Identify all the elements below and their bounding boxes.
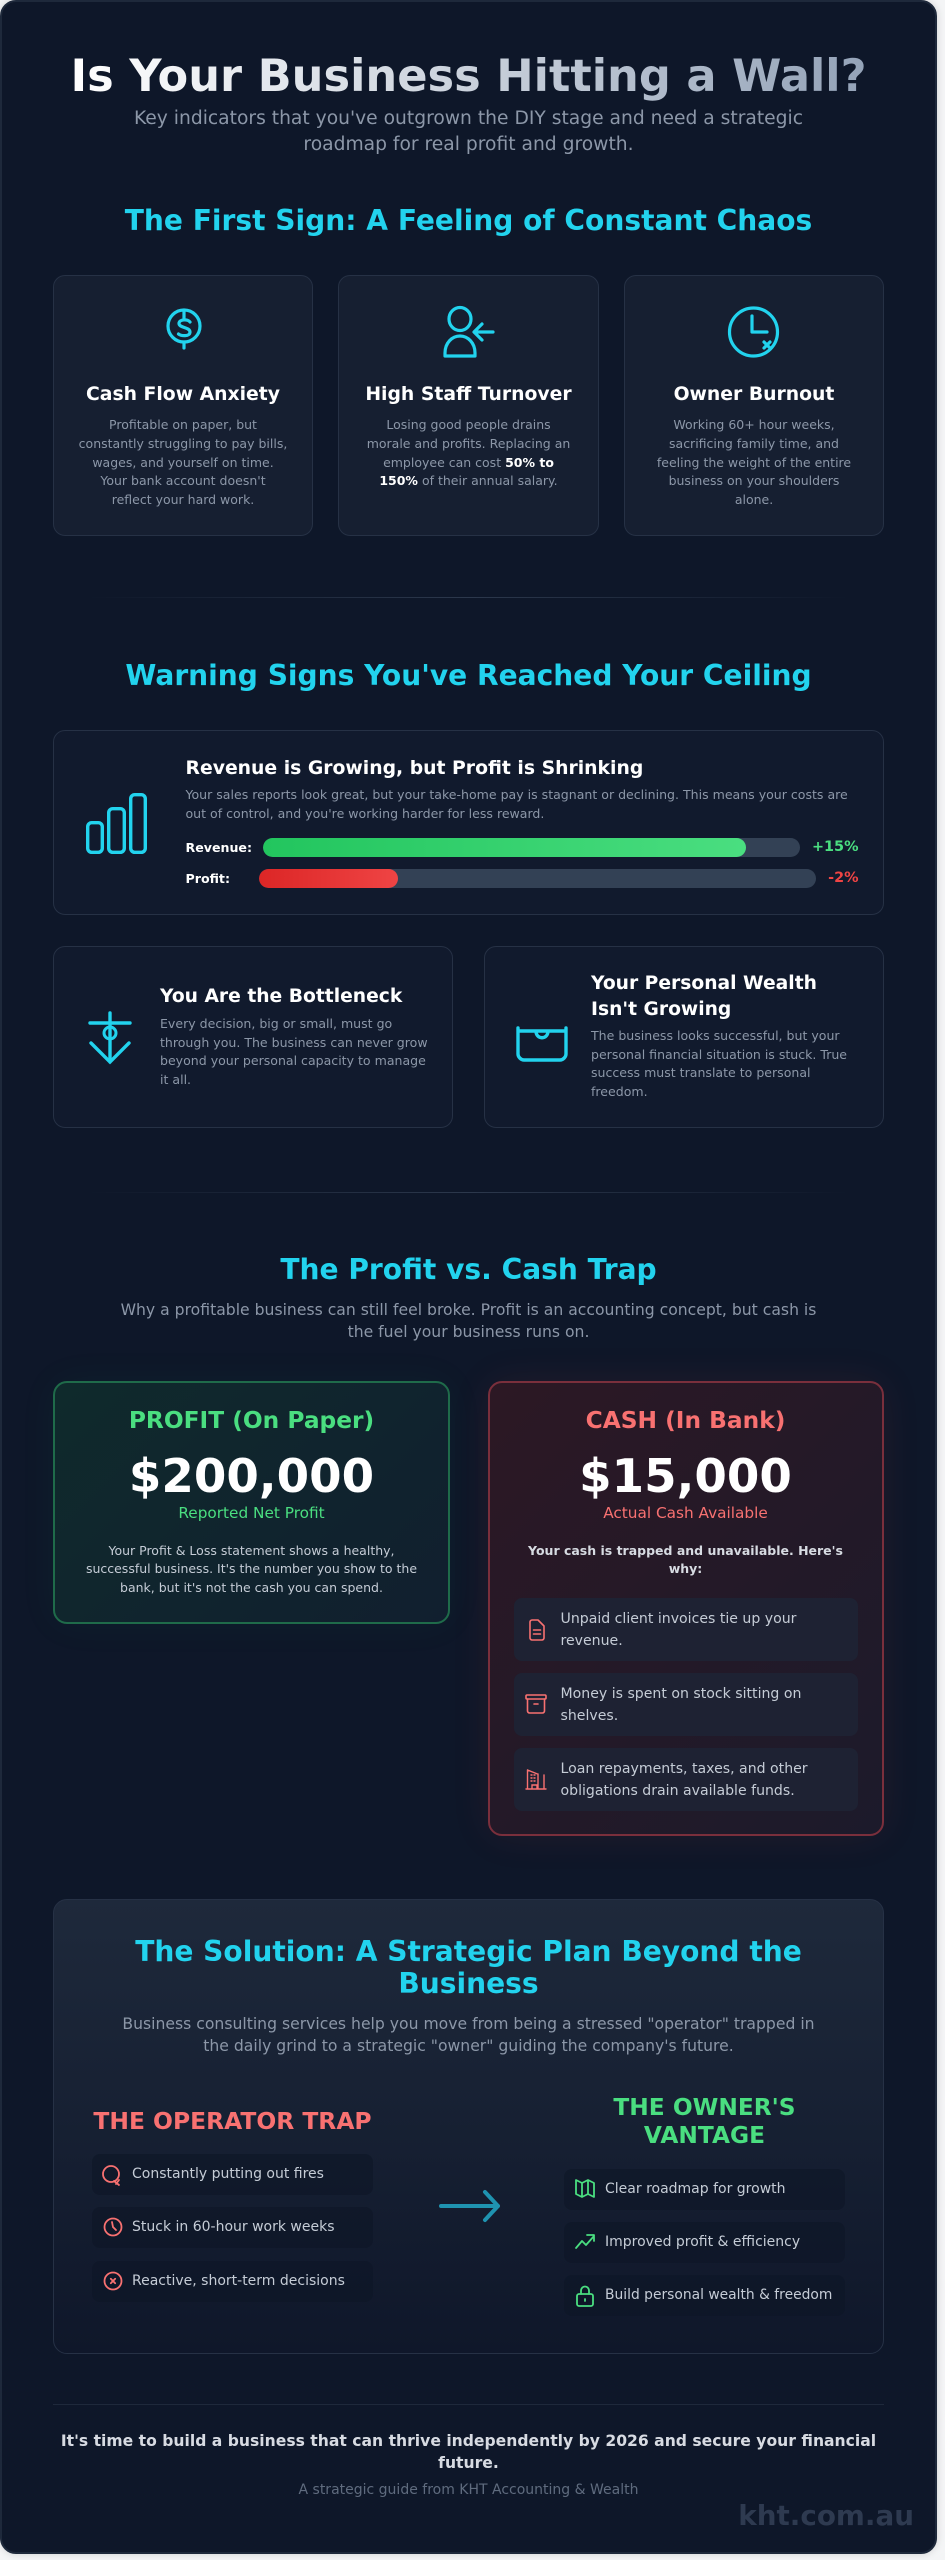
owner column heading: VANTAGE [644,2122,765,2149]
operator item: decisions [92,2261,373,2302]
item text: Stuck in 60-hour work weeks [132,2219,335,2235]
cash heading: CASH (In Bank) [586,1407,785,1434]
card text: wages, and yourself on time. [92,454,274,470]
cash value: $15,000 [579,1450,792,1504]
operator item: fires [92,2154,373,2195]
item text: obligations drain available funds. [560,1783,795,1799]
icon: bar chart [86,793,147,854]
arrow [439,2190,500,2222]
card text: business on your shoulders [669,473,839,488]
section intro: the fuel your business runs on. [348,1322,589,1341]
panel text: it all. [160,1072,191,1087]
item text: Loan repayments, taxes, and other [560,1761,808,1777]
profit text: Your Profit & Loss statement shows a healthy, [108,1542,395,1558]
profit bar [186,869,858,888]
operator item: hours [92,2207,373,2248]
panel title: Your Personal Wealth [591,973,817,994]
subtitle: Key indicators that you've outgrown the DIY stage and need a strategic [134,108,803,129]
profit value: $200,000 [129,1450,374,1504]
heading: profit vs cash: The Profit vs. Cash Trap [280,1253,657,1286]
revenue bar: +15% [812,838,858,854]
solution intro [122,2014,815,2055]
owner column heading [613,2094,796,2149]
footer credit: A strategic guide from KHT Accounting & Wealth [298,2482,638,2498]
profit bar: Profit: [186,871,230,886]
panel: profit [53,1381,450,1624]
panel text [160,1016,428,1087]
panel: the solution [53,1899,884,2354]
footer statement: future. [438,2454,499,2472]
section intro: Why a profitable business can still feel broke. Profit is an accounting concept, but cash is [121,1300,816,1319]
icon: map [575,2179,595,2198]
icon: document [529,1619,545,1641]
item text [560,1761,808,1799]
icon: x circle [104,2272,122,2290]
solution heading: The Solution: A Strategic Plan Beyond the [135,1935,802,1968]
panel: personal wealth [484,946,884,1128]
card text: 150% of their annual salary. [379,473,558,488]
panel text [590,1028,847,1099]
icon: building [525,1769,547,1790]
icon: anchor [88,1011,132,1064]
card text [367,417,570,488]
heading: first sign: The First Sign: A Feeling of Constant Chaos [125,204,812,237]
panel text: Every decision, big or small, must go [160,1016,392,1031]
operator column heading: THE OPERATOR TRAP [93,2107,372,2135]
panel: owner burnout [624,275,884,536]
solution intro: the daily grind to a strategic "owner" guiding the company's future. [203,2036,734,2055]
cash explanation: Your cash is trapped and unavailable. Here's [528,1542,843,1558]
solution heading: Business [398,1966,539,2000]
panel text: through you. The business can never grow [160,1035,428,1050]
card text: feeling the weight of the entire [657,454,851,470]
card text [79,417,287,507]
cash label: Actual Cash Available [603,1504,768,1522]
panel: cash [488,1381,884,1836]
cash explanation [528,1542,843,1576]
profit bar: -2% [828,870,858,886]
icon: search flame [102,2165,120,2186]
section intro [121,1300,816,1341]
owner item: roadmap [564,2169,845,2210]
revenue bar [186,838,858,857]
profit heading: PROFIT (On Paper) [129,1407,374,1434]
profit label: Reported Net Profit [178,1504,325,1522]
card text: employee can cost 50% to [383,454,554,470]
heading: warning signs: Warning Signs You've Reached Your Ceiling [125,659,812,692]
icon: person leaving [443,306,495,358]
panel title: Revenue is Growing, but Profit is Shrinking [186,758,643,779]
card title: Cash Flow Anxiety [86,384,280,405]
card text: sacrificing family time, and [669,436,839,451]
cash explanation: why: [669,1561,702,1576]
icon: clock [104,2218,122,2236]
title: Is Your Business Hitting a Wall? [70,50,867,102]
panel: cash flow anxiety [53,275,313,536]
panel text: out of control, and you're working harder for less reward. [186,806,544,821]
owner column heading: THE OWNER'S [613,2094,796,2121]
item text: Unpaid client invoices tie up your [560,1611,796,1627]
owner item: profit [564,2222,845,2263]
panel: high staff turnover [338,275,599,536]
card text: alone. [735,492,773,507]
icon: dollar coin [166,308,202,350]
item text: Reactive, short-term decisions [132,2273,345,2289]
item text: Constantly putting out fires [132,2166,324,2182]
panel: revenue vs profit [53,730,884,915]
card text [657,417,851,507]
panel text: The business looks successful, but your [591,1028,840,1043]
profit text [86,1542,417,1595]
card title: Owner Burnout [674,384,834,405]
item text: shelves. [560,1708,618,1724]
panel title: You Are the Bottleneck [160,986,402,1007]
icon: pocket [516,1026,568,1062]
panel title [590,973,817,1020]
panel text: success must translate to personal [591,1065,811,1080]
revenue bar: Revenue: [186,840,252,854]
panel text: Your sales reports look great, but your take-home pay is stagnant or declining. This means your costs are [186,787,848,802]
footer statement [61,2432,876,2472]
subtitle [134,108,803,154]
item text: Build personal wealth & freedom [605,2287,832,2303]
icon: lock [576,2286,594,2307]
card text: Profitable on paper, but [109,417,257,432]
panel text: personal financial situation is stuck. True [591,1047,847,1062]
card title: High Staff Turnover [365,384,572,405]
solution heading [135,1935,802,2000]
profit text: bank, but it's not the cash you can spend. [120,1580,383,1595]
item text [560,1686,801,1724]
card text: Working 60+ hour weeks, [673,417,835,432]
item: invoices [514,1598,858,1661]
card text: Losing good people drains [386,417,551,432]
card text: morale and profits. Replacing an [367,436,570,451]
panel: bottleneck [53,946,453,1128]
item text [560,1611,796,1649]
owner item: wealth [564,2275,845,2316]
panel text [186,787,848,821]
profit text: successful business. It's the number you show to the [86,1561,417,1576]
panel text: beyond your personal capacity to manage [160,1053,426,1068]
card text: constantly struggling to pay bills, [79,436,287,451]
item text: Money is spent on stock sitting on [560,1686,801,1702]
item text: Improved profit & efficiency [605,2234,800,2250]
icon: clock [728,306,780,358]
subtitle: roadmap for real profit and growth. [303,134,634,154]
icon: archive box [525,1694,547,1714]
item text: revenue. [560,1633,623,1649]
card text: Your bank account doesn't [100,473,266,488]
item: obligations [514,1748,858,1811]
card text: reflect your hard work. [112,492,254,507]
solution intro: Business consulting services help you move from being a stressed "operator" trapped in [122,2014,815,2033]
panel text: freedom. [591,1084,648,1099]
footer statement: It's time to build a business that can thrive independently by 2026 and secure your financial [61,2432,876,2450]
panel title: Isn't Growing [591,998,731,1020]
item text: Clear roadmap for growth [605,2181,786,2197]
watermark: kht.com.au [738,2499,914,2532]
icon: trending up [575,2234,595,2249]
item: stock [514,1673,858,1736]
